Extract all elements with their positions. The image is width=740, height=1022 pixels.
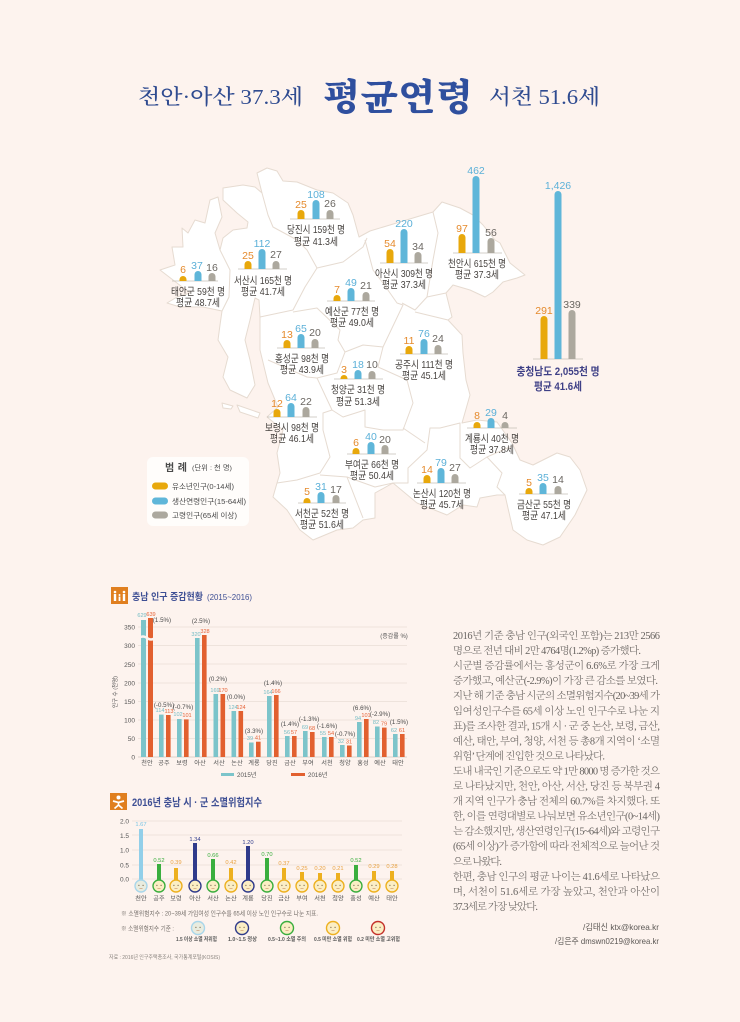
bars: Cheonan: 천안시 615천 명 <box>448 258 506 270</box>
text block: article body: 는 감소했지만, 생산연령인구(15~64세)와 고령인구 <box>453 824 660 838</box>
bar chart: population 2015-2016: 부여 <box>302 759 314 767</box>
text block: article body: 로 나타났지만, 천안, 아산, 서산, 당진 등 북부권 4 <box>453 780 661 792</box>
bars: Gyeryong <box>465 407 519 456</box>
bar chart: population 2015-2016: 114 <box>156 708 164 714</box>
title: 서천 51.6세 <box>489 85 600 109</box>
bars: Gongju: 평균 45.1세 <box>402 370 446 382</box>
bar chart: population 2015-2016: 101 <box>361 713 371 719</box>
bar chart: population 2015-2016: 61 <box>399 728 405 734</box>
text block: article body <box>453 629 661 913</box>
bars: Asan: 34 <box>412 241 424 253</box>
bar chart: population 2015-2016: 50 <box>128 736 135 743</box>
chart: extinction risk index: 0.66 <box>207 853 219 859</box>
bar chart: population 2015-2016: 2015년 <box>237 771 257 779</box>
bar chart: population 2015-2016: 2016년 <box>308 771 328 779</box>
chart: extinction risk index: 0.0 <box>120 876 129 884</box>
bar chart: population 2015-2016: 보령 <box>176 759 188 767</box>
bar chart: population 2015-2016: (증감률 %) <box>380 633 408 640</box>
chart: extinction risk index: 예산 <box>368 894 380 902</box>
bars: Asan: 아산시 309천 명 <box>375 268 433 280</box>
chart: extinction risk index: 태안 <box>386 894 398 902</box>
bar chart: population 2015-2016: 32 <box>338 739 344 745</box>
bars: Boryeong: 보령시 98천 명 <box>265 422 319 434</box>
bars: Cheonan: 56 <box>485 227 497 239</box>
text block: article body: 예산, 태안, 부여, 청양, 서천 등 총8개 지역이 ‘소멸 <box>453 734 660 748</box>
bars: Boryeong: 12 <box>271 398 283 410</box>
bar chart: population 2015-2016: 82 <box>373 720 379 726</box>
bars: Gongju <box>395 328 453 382</box>
bars: Cheonan: 462 <box>467 165 485 177</box>
bar chart: population 2015-2016: 68 <box>309 726 315 732</box>
bar chart: population 2015-2016: 31 <box>346 740 352 746</box>
bars: Taean: 6 <box>180 264 186 276</box>
bars: Seosan: 25 <box>242 250 254 262</box>
bars: Dangjin: 평균 41.3세 <box>294 236 338 248</box>
bars: Hongseong <box>275 323 329 376</box>
chart: extinction risk index <box>120 818 402 902</box>
bar chart: population 2015-2016: (-0.5%) <box>154 702 174 709</box>
source: 자료 : 2016년 인구주택총조사, 국가통계포털(KOSIS) <box>109 953 220 961</box>
bars: Gyeryong: 계룡시 40천 명 <box>465 433 519 445</box>
bars: Hongseong: 평균 43.9세 <box>280 364 324 376</box>
bars: Buyeo: 평균 50.4세 <box>350 470 394 482</box>
bars: Geumsan: 14 <box>552 474 564 486</box>
icon: person <box>110 793 127 810</box>
chart: extinction risk index: 1.67 <box>135 822 147 828</box>
bars: Chungnam total: 1,426 <box>545 180 571 192</box>
bars: Seosan: 112 <box>254 238 271 250</box>
bar chart: population 2015-2016: (0.2%) <box>209 676 227 683</box>
bars: Gongju: 11 <box>404 335 415 347</box>
bars: Nonsan: 14 <box>421 464 433 476</box>
bars: Seosan <box>234 238 292 298</box>
legend: 범 례 <box>165 461 187 474</box>
chart: extinction risk index: 홍성 <box>350 894 362 902</box>
bars: Taean <box>171 260 225 309</box>
bar chart: population 2015-2016: 169 <box>210 688 220 694</box>
chart: extinction risk index: 1.0 <box>120 848 129 854</box>
bar chart: population 2015-2016: 62 <box>391 728 397 734</box>
bar chart: population 2015-2016: 102 <box>173 712 183 718</box>
bars: Cheonan <box>448 165 506 281</box>
bars: Seocheon: 평균 51.6세 <box>300 519 344 531</box>
bars: Nonsan: 79 <box>435 457 447 469</box>
text block: article body: 도내 내국인 기준으로도 약 1만 8000 명 증가한 것으 <box>453 764 660 778</box>
icon: family <box>111 587 128 604</box>
heading: extinction risk index: 2016년 충남 시 · 군 소멸위험지수 <box>132 795 262 809</box>
credits <box>555 922 659 946</box>
bar chart: population 2015-2016: 0 <box>131 754 135 762</box>
map silhouette <box>160 168 587 545</box>
bar chart: population 2015-2016: 계룡 <box>248 759 260 767</box>
chart: extinction risk index: 서산 <box>207 894 219 902</box>
bar chart: population 2015-2016: 57 <box>291 730 297 736</box>
bars: Boryeong: 평균 46.1세 <box>270 433 314 445</box>
bar chart: population 2015-2016: (3.3%) <box>245 728 263 735</box>
bars: Nonsan: 논산시 120천 명 <box>413 488 471 500</box>
bar chart: population 2015-2016: 350 <box>124 624 135 632</box>
bars: Seocheon: 서천군 52천 명 <box>295 508 349 520</box>
bars: Geumsan: 5 <box>526 477 532 489</box>
bars: Gyeryong: 4 <box>502 410 508 422</box>
chart: extinction risk index: 0.21 <box>332 866 344 872</box>
text block: article body: 임여성인구수를 65세 이상 노인 인구수로 나눈 지 <box>453 704 660 718</box>
bars: Taean: 37 <box>191 260 203 272</box>
bars: Seocheon: 31 <box>315 481 327 493</box>
bars: Buyeo: 6 <box>353 437 359 449</box>
bar chart: population 2015-2016: 100 <box>124 718 135 724</box>
bar chart: population 2015-2016: 서천 <box>321 759 333 767</box>
chart: extinction risk index: 보령 <box>170 894 182 902</box>
bar chart: population 2015-2016: 논산 <box>231 759 243 767</box>
bars: Nonsan: 평균 45.7세 <box>420 499 464 511</box>
bar chart: population 2015-2016: 서산 <box>213 759 225 767</box>
chart: extinction risk index: 0.42 <box>225 860 237 866</box>
bars: Geumsan: 35 <box>537 472 549 484</box>
bars: Dangjin <box>287 189 345 248</box>
chart: extinction risk index: 0.5 <box>120 862 129 870</box>
title: 평균연령 <box>323 77 473 119</box>
chart: extinction risk index: 0.25 <box>296 866 308 872</box>
heading: extinction risk index <box>110 793 262 810</box>
chart: extinction risk index: 논산 <box>225 894 237 902</box>
bars: Dangjin: 당진시 159천 명 <box>287 224 345 236</box>
chart: extinction risk index: 아산 <box>189 894 201 902</box>
bars: Hongseong: 13 <box>281 329 293 341</box>
bar chart: population 2015-2016: 328 <box>200 629 210 635</box>
bars: Asan: 220 <box>395 218 413 230</box>
legend: (단위 : 천 명) <box>192 463 232 472</box>
bars: Cheongyang: 10 <box>366 359 378 371</box>
bars: Cheongyang: 18 <box>352 359 364 371</box>
legend: 고령인구(65세 이상) <box>172 510 237 520</box>
bar chart: population 2015-2016: 아산 <box>194 759 206 767</box>
note: index definition: ※ 소멸위험지수 : 20~39세 가임여성 인구수를 65세 이상 노인 인구수로 나눈 지표. <box>121 908 318 918</box>
bar chart: population 2015-2016: 166 <box>271 689 281 695</box>
bars: Buyeo <box>345 431 399 482</box>
chart: extinction risk index: 0.52 <box>153 858 165 864</box>
legend: risk levels: 1.5 이상 소멸 저위험 <box>176 935 217 943</box>
bars: Buyeo: 20 <box>379 434 391 446</box>
bars: Boryeong: 22 <box>300 396 312 408</box>
chart: extinction risk index: 1.20 <box>242 840 254 846</box>
bars: Seosan: 27 <box>270 249 282 261</box>
region boundaries <box>220 193 512 518</box>
chart: extinction risk index: 1.34 <box>189 837 201 843</box>
bar chart: population 2015-2016: 69 <box>302 725 308 731</box>
text block: article body: 지난 해 기준 충남 시군의 소멸위험지수(20~39세 가 <box>453 689 660 702</box>
text block: article body: 시군별 증감률에서는 홍성군이 6.6%로 가장 크게 <box>453 659 660 672</box>
legend: risk levels: 1.0~1.5 정상 <box>228 935 257 943</box>
bars: Yesan: 49 <box>345 277 357 289</box>
legend: risk levels <box>121 922 400 943</box>
bars: Gyeryong: 29 <box>485 407 497 419</box>
chart: extinction risk index: 0.29 <box>368 864 380 870</box>
credits: /김태신 ktx@korea.kr <box>583 922 659 932</box>
bars: Gongju: 24 <box>432 333 444 345</box>
bar chart: population 2015-2016: (-0.7%) <box>173 704 193 711</box>
panel: map of Chungnam <box>160 168 587 545</box>
bar chart: population 2015-2016: 164 <box>263 690 273 696</box>
chart: extinction risk index: 1.5 <box>120 833 129 840</box>
bars: Dangjin: 25 <box>295 199 307 211</box>
bars: Asan: 54 <box>384 238 396 250</box>
bar chart: population 2015-2016: 94 <box>355 716 361 722</box>
bars: Chungnam total <box>516 180 600 393</box>
bars: Dangjin: 26 <box>324 198 336 210</box>
text block: article body: 으로 나왔다. <box>453 855 502 868</box>
bar chart: population 2015-2016: 320 <box>191 632 201 638</box>
bars: Yesan <box>325 277 379 329</box>
bars: Geumsan: 금산군 55천 명 <box>517 499 571 511</box>
bar chart: population 2015-2016: (1.4%) <box>264 680 282 687</box>
bars: Seosan: 평균 41.7세 <box>241 286 285 298</box>
bars: Taean: 태안군 59천 명 <box>171 286 225 298</box>
risk faces <box>135 880 398 892</box>
bar chart: population 2015-2016: 인구 수 (천명) <box>111 676 119 708</box>
text block: article body: 개 지역 인구가 충남 전체의 60.7%를 차지했다. 또 <box>453 794 660 808</box>
bars: Seocheon <box>295 481 349 531</box>
bars: Buyeo: 40 <box>365 431 377 443</box>
bars: Cheongyang: 평균 51.3세 <box>336 396 380 408</box>
text block: article body: 명으로 전년 대비 2만 4764명(1.2%p) 증가했다. <box>453 644 641 657</box>
text block: article body: 증가했고, 예산군(-2.9%)이 가장 큰 감소를 보였다. <box>453 674 658 687</box>
chart: extinction risk index: 0.39 <box>170 860 182 866</box>
bars: Chungnam total: 충청남도 2,055천 명 <box>516 364 600 378</box>
bar chart: population 2015-2016: 629 <box>137 613 147 619</box>
bars: Yesan: 7 <box>334 284 340 296</box>
bars: Yesan: 21 <box>360 280 372 292</box>
bars: Cheongyang: 청양군 31천 명 <box>331 384 385 396</box>
bar chart: population 2015-2016: (1.4%) <box>281 721 299 728</box>
chart: extinction risk index: 0.70 <box>261 852 273 858</box>
bars: Dangjin: 108 <box>307 189 325 201</box>
bar chart: population 2015-2016: 124 <box>228 705 238 711</box>
chart: extinction risk index: 0.28 <box>386 864 398 870</box>
bars: Boryeong: 64 <box>285 392 297 404</box>
bars: Cheongyang: 3 <box>341 364 347 376</box>
text block: article body: 표)를 조사한 결과, 15개 시 · 군 중 논산, 보령, 금산, <box>453 720 660 732</box>
legend: risk levels: 0.5~1.0 소멸 주의 <box>268 935 306 943</box>
credits: /김은주 dmswn0219@korea.kr <box>555 936 659 946</box>
bars: Buyeo: 부여군 66천 명 <box>345 459 399 471</box>
bars: Gongju: 76 <box>418 328 430 340</box>
bars: Taean: 평균 48.7세 <box>176 297 220 309</box>
bar chart: population 2015-2016: 200 <box>124 680 135 688</box>
bars: Chungnam total: 291 <box>535 305 553 317</box>
text block: article body: 한, 이를 연령대별로 나눠보면 유소년인구(0~14세) <box>453 810 660 822</box>
bars: Boryeong <box>265 392 319 445</box>
text block: article body: 37.3세로 가장 낮았다. <box>453 900 538 913</box>
text block: article body: 한편, 충남 인구의 평균 나이는 41.6세로 나타났으 <box>453 870 660 883</box>
chart: extinction risk index: 계룡 <box>242 894 254 902</box>
bar chart: population 2015-2016: 천안 <box>141 759 153 767</box>
bars: Seocheon: 17 <box>330 484 342 496</box>
legend: 생산연령인구(15-64세) <box>172 496 247 506</box>
chart: extinction risk index: 2.0 <box>120 818 129 826</box>
bars: Cheongyang <box>331 359 385 408</box>
bar chart: population 2015-2016: 41 <box>255 736 261 742</box>
bar chart: population 2015-2016: 101 <box>182 713 192 719</box>
bar chart: population 2015-2016: (-1.3%) <box>299 716 319 723</box>
bars: Asan <box>375 218 433 291</box>
bar chart: population 2015-2016: (1.5%) <box>153 617 171 624</box>
bars: Hongseong: 홍성군 98천 명 <box>275 352 329 365</box>
bar chart: population 2015-2016: 홍성 <box>357 759 369 767</box>
text block: article body: 2016년 기준 충남 인구(외국인 포함)는 213만 2566 <box>453 629 660 642</box>
bar chart: population 2015-2016: (6.6%) <box>353 705 371 712</box>
bars: Chungnam total: 평균 41.6세 <box>534 380 582 393</box>
bars: Nonsan: 27 <box>449 462 461 474</box>
legend: risk levels: 0.2 미만 소멸 고위험 <box>357 935 400 943</box>
bar chart: population 2015-2016: 250 <box>124 662 135 669</box>
bars: Cheonan: 97 <box>456 223 468 235</box>
bar chart: population 2015-2016: 639 <box>146 612 156 618</box>
chart: extinction risk index: 당진 <box>261 894 273 902</box>
bars: Geumsan <box>517 472 571 522</box>
bar chart: population 2015-2016: (-1.6%) <box>317 723 337 730</box>
bars: Gyeryong: 평균 37.8세 <box>470 444 514 456</box>
bar chart: population 2015-2016: 공주 <box>158 760 170 767</box>
bars: Cheonan: 평균 37.3세 <box>455 269 499 281</box>
text block: article body: 며, 서천이 51.6세로 가장 높았고, 천안과 아산이 <box>453 885 660 898</box>
text block: article body: (65세 이상)가 증가함에 따라 전체적으로 늘어난 것 <box>453 840 660 852</box>
bar chart: population 2015-2016: 170 <box>218 688 228 694</box>
heading: population change <box>111 587 252 604</box>
heading: population change: 충남 인구 증감현황 <box>132 591 203 603</box>
bars: Gongju: 공주시 111천 명 <box>395 359 453 371</box>
bar chart: population 2015-2016: (-2.9%) <box>370 711 390 718</box>
bars: Seosan: 서산시 165천 명 <box>234 275 292 287</box>
bars: Chungnam total: 339 <box>563 299 581 311</box>
heading: population change: (2015~2016) <box>207 593 252 602</box>
chart: extinction risk index: 천안 <box>135 894 147 902</box>
bar chart: population 2015-2016: 124 <box>236 705 246 711</box>
bars: Yesan: 예산군 77천 명 <box>325 305 379 318</box>
bars: Taean: 16 <box>206 262 218 274</box>
bar chart: population 2015-2016: 150 <box>124 699 135 706</box>
bar chart: population 2015-2016: 113 <box>165 709 173 715</box>
text block: article body: 위험’ 단계에 진입한 것으로 나타났다. <box>453 750 605 762</box>
bar chart: population 2015-2016: 예산 <box>374 759 386 767</box>
title: 천안·아산 37.3세 <box>138 85 303 109</box>
bars: Geumsan: 평균 47.1세 <box>522 510 566 522</box>
chart: extinction risk index: 금산 <box>278 894 290 902</box>
bars: Asan: 평균 37.3세 <box>382 279 426 291</box>
bars: Seocheon: 5 <box>304 486 310 498</box>
bar chart: population 2015-2016 <box>111 612 408 779</box>
bar chart: population 2015-2016: 79 <box>381 722 387 728</box>
chart: extinction risk index: 0.52 <box>350 858 362 864</box>
bar chart: population 2015-2016: 54 <box>328 731 334 737</box>
bar chart: population 2015-2016: 청양 <box>339 759 351 767</box>
chart: extinction risk index: 공주 <box>153 896 165 902</box>
bar chart: population 2015-2016: 55 <box>320 731 326 737</box>
bars: Gyeryong: 8 <box>474 410 480 422</box>
bar chart: population 2015-2016: 300 <box>124 643 135 650</box>
legend <box>147 457 249 526</box>
legend: risk levels: ※ 소멸위험지수 기준 : <box>121 924 174 932</box>
bars: Yesan: 평균 49.0세 <box>330 317 374 329</box>
bar chart: population 2015-2016: (-0.7%) <box>335 731 355 738</box>
bars: Nonsan <box>413 457 471 511</box>
bars: Hongseong: 20 <box>309 327 321 339</box>
chart: extinction risk index: 0.20 <box>314 866 326 872</box>
bar chart: population 2015-2016: 56 <box>284 730 290 736</box>
bar chart: population 2015-2016: 태안 <box>392 759 404 767</box>
chart: extinction risk index: 부여 <box>296 894 308 902</box>
bar chart: population 2015-2016: (1.5%) <box>390 719 408 726</box>
title <box>138 77 600 119</box>
bar chart: population 2015-2016: (2.5%) <box>192 618 210 625</box>
bar chart: population 2015-2016: 당진 <box>266 759 278 767</box>
bar chart: population 2015-2016: (0.0%) <box>227 694 245 701</box>
chart: extinction risk index: 청양 <box>332 894 344 902</box>
bar chart: population 2015-2016: 39 <box>247 736 253 742</box>
chart: extinction risk index: 서천 <box>314 894 326 902</box>
chart: extinction risk index: 0.37 <box>278 861 290 867</box>
legend: risk levels: 0.5 미만 소멸 위험 <box>314 935 352 943</box>
legend: 유소년인구(0-14세) <box>172 481 235 491</box>
bar chart: population 2015-2016: 금산 <box>284 759 296 767</box>
bars: Hongseong: 65 <box>295 323 307 335</box>
